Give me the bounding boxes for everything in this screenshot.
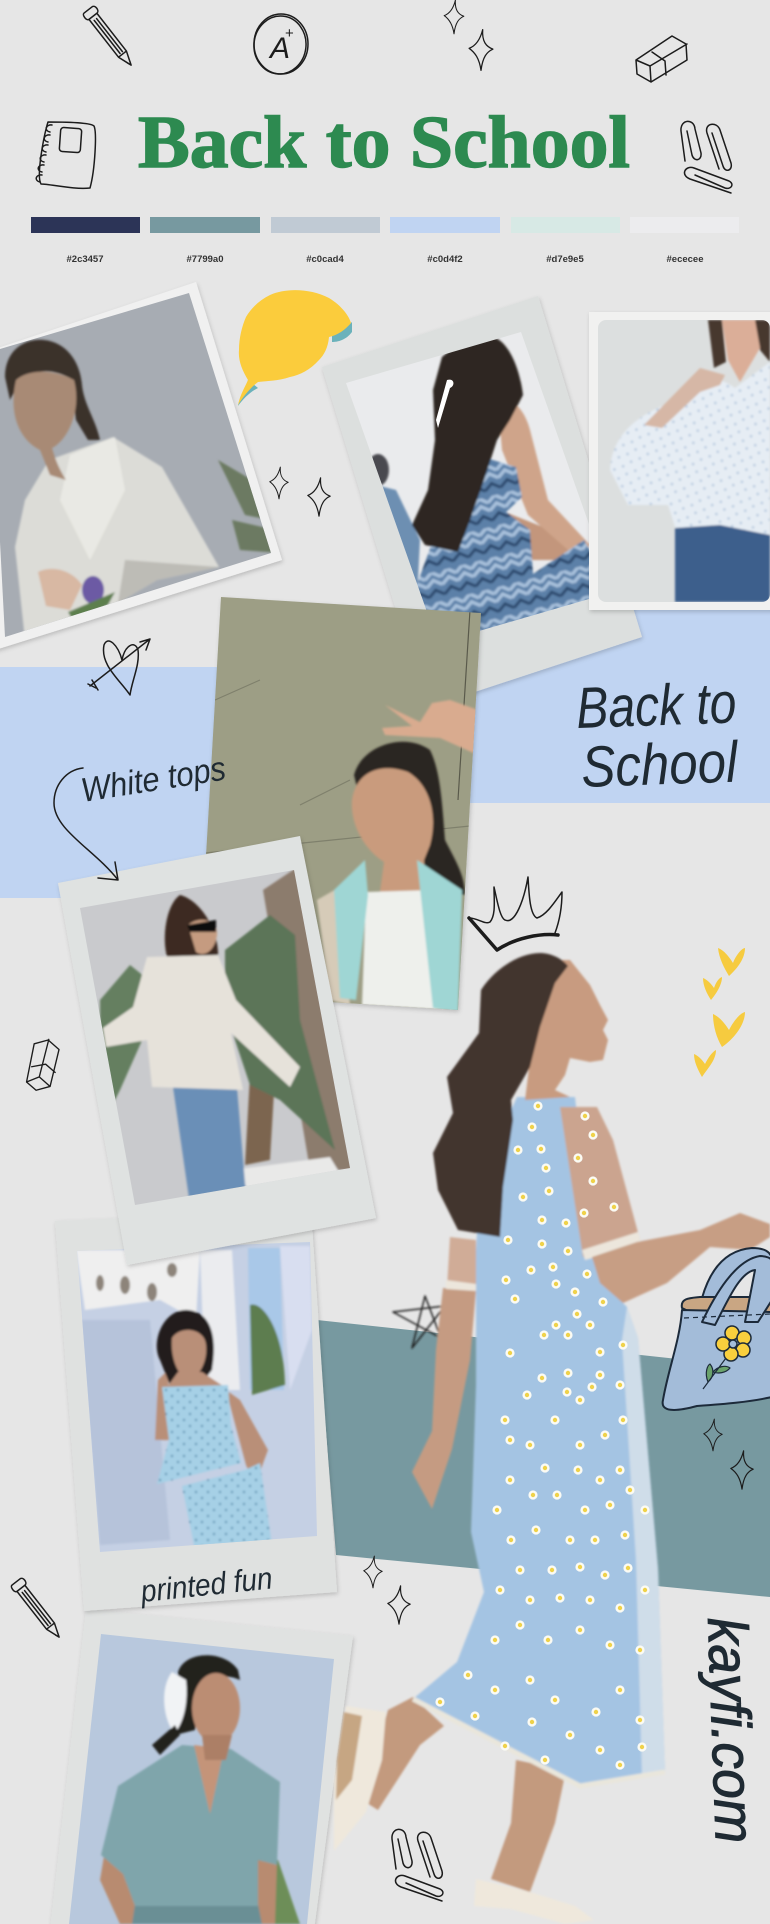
frame [0, 282, 282, 650]
photo: olive wall selfie [198, 597, 481, 1012]
icon: heart with arrow [88, 639, 150, 695]
bag handle front [702, 1256, 770, 1325]
swatch labels: #2c3457 [67, 254, 103, 265]
icon: sparkles lower [364, 1556, 410, 1624]
swatch labels: #c0cad4 [306, 254, 344, 265]
icon: sparkles by photo [270, 467, 330, 516]
front shoe [474, 1879, 594, 1924]
text: printed fun: printed fun [138, 1560, 274, 1609]
icon: A-plus grade [251, 13, 309, 77]
teal band [317, 1320, 770, 1597]
text: Back to School script [575, 670, 740, 800]
sheer right edge [622, 1307, 665, 1777]
figure: woman in daisy dress [334, 953, 770, 1924]
polaroid: white shirt [0, 282, 290, 650]
icon: eraser left [11, 1034, 73, 1096]
icon: A-plus grade: A [268, 32, 290, 65]
sleeve hem [582, 1232, 641, 1260]
blue band left [0, 667, 300, 898]
photo [0, 293, 271, 637]
icon: notebook [36, 122, 95, 188]
icon: crown [469, 877, 562, 950]
swatch labels: #c0d4f2 [427, 254, 463, 265]
title: Back to School [138, 102, 630, 184]
lifted shoe insole [336, 1712, 362, 1800]
swatch labels: #7799a0 [187, 254, 223, 265]
icon: sparkles top [444, 0, 493, 70]
legs [362, 1697, 566, 1892]
sheer sleeve [560, 1107, 640, 1257]
icon: A-plus grade: + [285, 25, 294, 42]
polaroid: printed fun [55, 1210, 337, 1611]
colour swatches [31, 217, 739, 233]
icon: curved arrow [54, 768, 118, 880]
photo [70, 1240, 320, 1560]
photo [346, 332, 589, 631]
icon: pencil left [10, 1577, 65, 1642]
icon: yellow hearts [694, 948, 745, 1077]
left arm [412, 1288, 476, 1509]
frame [50, 1609, 353, 1924]
polaroid: crochet set [322, 296, 642, 708]
lifted shoe [334, 1706, 386, 1851]
bag body [663, 1310, 770, 1410]
swatch labels: #d7e9e5 [546, 254, 584, 265]
icon: paper clips bottom [392, 1829, 443, 1901]
text: Back to School script: School [580, 730, 740, 800]
frame [58, 836, 376, 1265]
dress [413, 1097, 665, 1786]
bag inner [682, 1297, 770, 1312]
polaroid: white top [58, 836, 376, 1265]
icon: pencil [82, 5, 137, 70]
polaroid: bottom teal shirt [50, 1609, 353, 1924]
icon: sparkles near bag [704, 1419, 753, 1489]
photo [598, 320, 770, 602]
daisies [435, 1101, 650, 1770]
frame [589, 312, 770, 610]
polaroid: floral blouse [589, 312, 770, 610]
sheer hem [413, 1699, 665, 1786]
hair [433, 953, 568, 1237]
text: White tops: White tops [78, 750, 228, 810]
icon: tote bag [663, 1248, 770, 1410]
icon: paper clips top [681, 121, 732, 193]
photo [60, 1630, 340, 1924]
photo [80, 870, 350, 1205]
blue band right [470, 610, 770, 803]
neck and face [525, 960, 608, 1100]
bag stitch [684, 1314, 770, 1318]
icon: yellow cap [238, 290, 352, 406]
text: Back to School script: Back to [575, 670, 737, 741]
flower [703, 1326, 751, 1389]
icon: star doodle behind arm [393, 1296, 445, 1348]
swatch labels: #ececee [667, 254, 703, 265]
bag handles back [702, 1248, 770, 1298]
icon: eraser top [636, 36, 687, 82]
swatch labels [67, 254, 703, 265]
frame [55, 1210, 337, 1611]
frame [322, 296, 642, 708]
right arm [592, 1213, 770, 1303]
text: kayfi.com: kayfi.com [696, 1616, 767, 1844]
left sleeve [447, 1237, 476, 1290]
